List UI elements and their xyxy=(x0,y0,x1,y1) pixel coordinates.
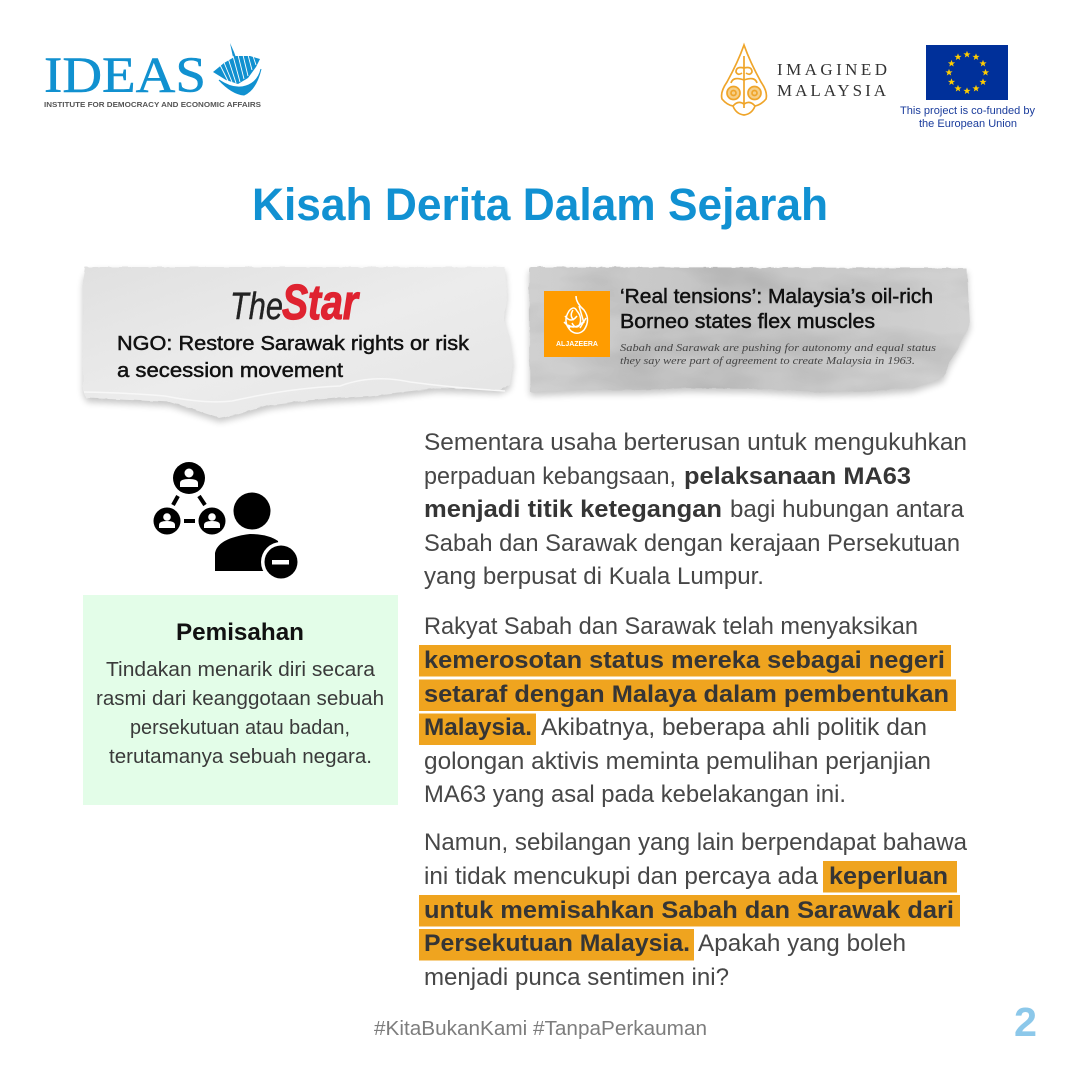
highlight: decline in status: kemerosotan status mereka sebagai negeri xyxy=(424,647,945,674)
logo: IDEAS xyxy=(44,43,261,109)
highlight: need to separate: untuk memisahkan Sabah dan Sarawak dari xyxy=(424,897,954,924)
definition text xyxy=(96,659,384,768)
definition text: rasmi dari keanggotaan sebuah xyxy=(96,688,384,710)
subhead: Al Jazeera: Sabah and Sarawak are pushing for autonomy and equal status xyxy=(620,342,936,354)
logo: Imagined Malaysia: MALAYSIA xyxy=(777,81,887,100)
text block: paragraph 3 xyxy=(419,829,967,991)
caption: EU co-funding xyxy=(900,105,1035,130)
highlight: decline in status: setaraf dengan Malaya dalam pembentukan xyxy=(424,681,949,708)
text block: paragraph 2: Akibatnya, beberapa ahli politik dan xyxy=(541,714,927,741)
text block: paragraph 1: pelaksanaan MA63 xyxy=(684,463,911,490)
text block: paragraph 2: golongan aktivis meminta pemulihan perjanjian xyxy=(424,748,931,775)
panel: The Star clipping xyxy=(83,267,513,422)
text block: paragraph 1 xyxy=(424,429,967,590)
text block: paragraph 1: Sabah dan Sarawak dengan kerajaan Persekutuan xyxy=(424,530,960,557)
highlight: need to separate xyxy=(419,861,960,960)
headline: The Star xyxy=(117,332,470,382)
heading: Pemisahan: Pemisahan xyxy=(176,619,304,646)
logo: EU flag xyxy=(926,45,1008,100)
highlight: need to separate: keperluan xyxy=(829,863,948,890)
text block: paragraph 3: Apakah yang boleh xyxy=(698,930,906,957)
headline: The Star: a secession movement xyxy=(117,359,343,382)
logo: Imagined Malaysia: IMAGINED xyxy=(777,60,887,79)
logo: The Star xyxy=(230,276,360,330)
text block: paragraph 1: yang berpusat di Kuala Lumpur. xyxy=(424,563,764,590)
definition text: persekutuan atau badan, xyxy=(130,717,350,739)
subhead: Al Jazeera: they say were part of agreement to create Malaysia in 1963. xyxy=(620,355,915,367)
headline: Al Jazeera: ‘Real tensions’: Malaysia’s oil-rich xyxy=(620,285,933,308)
highlight: decline in status xyxy=(419,645,956,745)
text block: paragraph 1: bagi hubungan antara xyxy=(730,496,964,523)
text block: paragraph 1: Sementara usaha berterusan untuk mengukuhkan xyxy=(424,429,967,456)
text block: paragraph 3: menjadi punca sentimen ini? xyxy=(424,964,729,991)
highlight: decline in status: Malaysia. xyxy=(424,714,532,741)
headline: Al Jazeera: Borneo states flex muscles xyxy=(620,310,875,333)
headline: The Star: NGO: Restore Sarawak rights or risk xyxy=(117,332,470,355)
icon: person leaving a network xyxy=(154,462,301,582)
definition text: terutamanya sebuah negara. xyxy=(109,746,372,768)
text block: paragraph 2 xyxy=(419,613,956,808)
logo: IDEAS: INSTITUTE FOR DEMOCRACY AND ECONOMIC AFFAIRS xyxy=(44,100,261,109)
caption: EU co-funding: the European Union xyxy=(919,118,1017,130)
text block: paragraph 3: Namun, sebilangan yang lain berpendapat bahawa xyxy=(424,829,967,856)
icon: wayang gunungan xyxy=(722,45,766,115)
highlight: need to separate: Persekutuan Malaysia. xyxy=(424,930,690,957)
logo: IDEAS: IDEAS xyxy=(44,48,206,104)
text block: paragraph 1: perpaduan kebangsaan, xyxy=(424,463,676,490)
subhead: Al Jazeera xyxy=(620,342,936,367)
text block: paragraph 2: Rakyat Sabah dan Sarawak telah menyaksikan xyxy=(424,613,918,640)
title: Kisah Derita Dalam Sejarah xyxy=(252,179,828,230)
definition text: Tindakan menarik diri secara xyxy=(106,659,376,681)
panel: definition of Pemisahan xyxy=(83,595,398,805)
icon: IDEAS bird xyxy=(213,43,261,95)
logo: Imagined Malaysia xyxy=(722,45,887,115)
hashtags: #KitaBukanKami #TanpaPerkauman xyxy=(374,1017,707,1040)
headline: Al Jazeera xyxy=(620,285,933,333)
page number: 2 xyxy=(1014,999,1037,1045)
caption: EU co-funding: This project is co-funded by xyxy=(900,105,1035,117)
panel: Al Jazeera clipping xyxy=(529,267,970,396)
logo: The Star: Star xyxy=(282,276,360,330)
logo: The Star: The xyxy=(230,286,283,328)
logo: Al Jazeera: ALJAZEERA xyxy=(556,339,599,348)
text block: paragraph 2: MA63 yang asal pada kebelakangan ini. xyxy=(424,781,846,808)
logo: Al Jazeera xyxy=(544,291,610,357)
text block: paragraph 1: menjadi titik ketegangan xyxy=(424,496,722,523)
text block: paragraph 3: ini tidak mencukupi dan percaya ada xyxy=(424,863,818,890)
